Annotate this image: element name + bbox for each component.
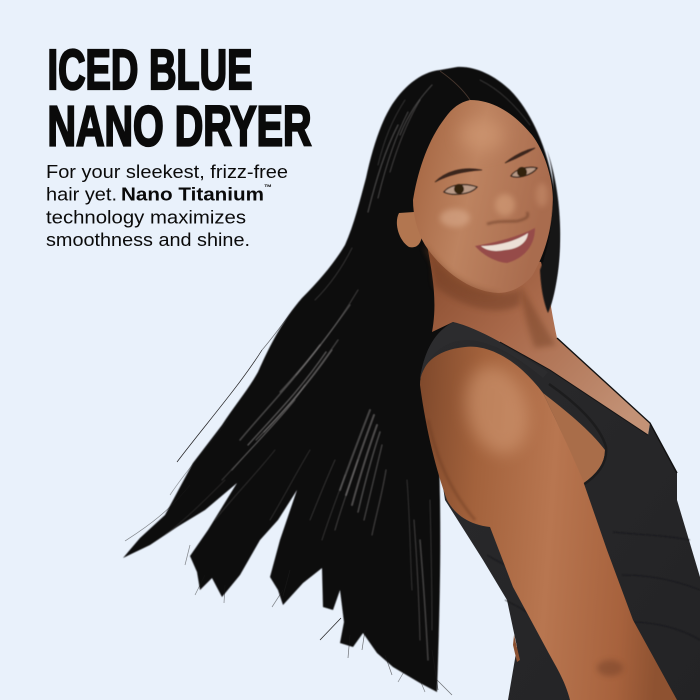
right eye — [511, 167, 537, 177]
right hair strand over face edge — [540, 150, 560, 313]
neck and chest skin — [426, 240, 650, 435]
cheek highlights — [440, 209, 470, 227]
neckline edge — [500, 342, 648, 435]
title — [48, 38, 312, 158]
photo: woman with long flowing hair — [123, 67, 700, 700]
flyaway strands — [125, 308, 452, 695]
nose — [487, 194, 528, 224]
chest side skin — [543, 393, 605, 484]
title: NANO DRYER — [48, 94, 312, 158]
description text: technology maximizes — [46, 206, 246, 228]
smile — [475, 228, 535, 263]
description text: ™ — [264, 183, 272, 192]
shoulder highlight — [456, 359, 538, 461]
description text: smoothness and shine. — [46, 229, 250, 250]
title: ICED BLUE — [48, 38, 252, 102]
back and arm skin — [420, 347, 677, 700]
hair parting — [440, 71, 470, 100]
hair shine — [165, 80, 530, 660]
jaw shadow — [425, 245, 500, 296]
fabric folds — [487, 532, 700, 640]
description text: hair yet. — [46, 184, 117, 204]
throat shadow — [520, 285, 556, 348]
description text — [46, 161, 288, 250]
elbow shadow — [597, 660, 623, 676]
face — [397, 100, 553, 296]
ear — [397, 212, 422, 247]
neck shadow under jaw — [432, 258, 520, 310]
strap — [420, 323, 548, 378]
forehead highlight — [460, 119, 504, 151]
left eye — [444, 184, 477, 194]
back crease — [428, 420, 475, 520]
tank top — [420, 322, 700, 700]
armhole trim — [549, 384, 606, 485]
right eyebrow — [505, 148, 535, 163]
hair — [123, 67, 560, 695]
left eyebrow — [435, 169, 482, 182]
description text: Nano Titanium — [121, 184, 264, 204]
face shape — [413, 100, 553, 293]
small skin gap at waist — [513, 635, 520, 662]
description text: For your sleekest, frizz-free — [46, 161, 288, 182]
